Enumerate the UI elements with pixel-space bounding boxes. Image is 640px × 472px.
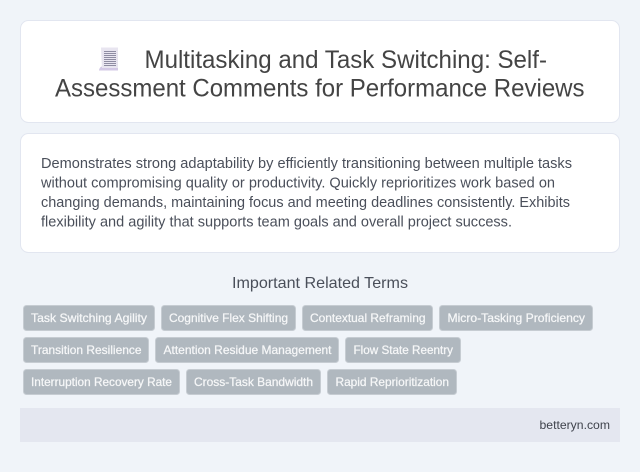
text block: self-assessment comment: without compromising quality or productivity. Quickly reprioritizes work based on [40,176,555,192]
tag: Micro-Tasking Proficiency [440,306,592,330]
panel: description card [20,134,620,252]
tag: Cognitive Flex Shifting [162,306,296,330]
icon: document receipt [99,48,118,70]
tag: Rapid Reprioritization: Rapid Reprioritization [336,375,449,389]
tag: Rapid Reprioritization [328,370,456,394]
tag: Task Switching Agility: Task Switching Agility [31,311,147,325]
tag: Interruption Recovery Rate: Interruption Recovery Rate [31,375,172,389]
tag: Cognitive Flex Shifting: Cognitive Flex Shifting [169,311,288,325]
tag: Contextual Reframing [302,306,432,330]
heading: important related terms: Important Related Terms [232,275,408,292]
panel: title card [20,20,620,122]
title: Multitasking and Task Switching: Self- [144,46,547,74]
title [55,46,584,102]
tag: Interruption Recovery Rate [24,370,180,394]
tag group: related terms [24,306,592,394]
tag: Transition Resilience [24,338,148,362]
tag: Micro-Tasking Proficiency: Micro-Tasking Proficiency [448,311,585,325]
footer bar [20,408,620,442]
text block: self-assessment comment: Demonstrates strong adaptability by efficiently transitioning between multiple tasks [41,156,572,172]
tag: Task Switching Agility [24,306,154,330]
text block: self-assessment comment: flexibility and agility that supports team goals and overall project success. [41,214,512,230]
tag: Cross-Task Bandwidth: Cross-Task Bandwidth [194,375,313,389]
footer text: site name: betteryn.com [540,418,610,432]
tag: Cross-Task Bandwidth [186,370,320,394]
text block: self-assessment comment: changing demands, maintaining focus and meeting deadlines consistently. Exhibits [41,195,570,211]
tag: Contextual Reframing: Contextual Reframing [310,311,426,325]
text block: self-assessment comment [40,156,572,230]
tag: Attention Residue Management: Attention Residue Management [164,343,332,357]
tag: Flow State Reentry: Flow State Reentry [354,343,453,357]
tag: Transition Resilience: Transition Resilience [31,343,142,357]
tag: Attention Residue Management [156,338,338,362]
title: Assessment Comments for Performance Reviews [55,74,584,102]
tag: Flow State Reentry [346,338,460,362]
